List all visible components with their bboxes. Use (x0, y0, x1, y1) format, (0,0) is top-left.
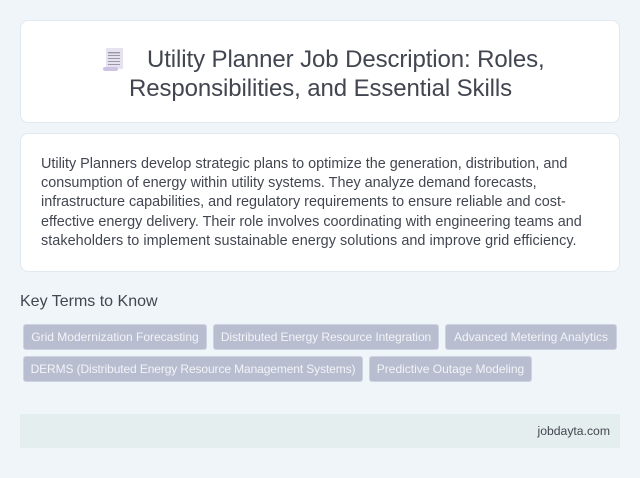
tag: advanced metering analytics (445, 324, 617, 350)
panel: description card (20, 133, 620, 272)
panel: title card (20, 20, 620, 123)
tag: DERMS (23, 356, 363, 382)
description text: effective energy delivery. Their role involves coordinating with engineering teams and (41, 214, 582, 230)
description text: stakeholders to implement sustainable energy solutions and improve grid efficiency. (41, 233, 577, 249)
tag list (23, 324, 617, 382)
tag: DERMS: DERMS (Distributed Energy Resource Management Systems) (31, 362, 355, 376)
title: Responsibilities, and Essential Skills (129, 75, 512, 102)
tag: predictive outage modeling: Predictive Outage Modeling (377, 362, 524, 376)
description text: infrastructure capabilities, and regulatory requirements to ensure reliable and cost- (41, 194, 566, 210)
tag: grid modernization forecasting: Grid Modernization Forecasting (31, 330, 199, 344)
title (129, 46, 545, 102)
tag: distributed energy resource integration: Distributed Energy Resource Integration (221, 330, 431, 344)
heading: key terms: Key Terms to Know (20, 293, 158, 310)
description text: Utility Planners develop strategic plans to optimize the generation, distribution, and (41, 156, 567, 172)
description text: consumption of energy within utility systems. They analyze demand forecasts, (41, 175, 537, 191)
footer source: jobdayta.com (538, 424, 610, 438)
tag: advanced metering analytics: Advanced Metering Analytics (454, 330, 608, 344)
tag: predictive outage modeling (369, 356, 532, 382)
tag: distributed energy resource integration (213, 324, 439, 350)
footer bar (20, 414, 620, 448)
title: Utility Planner Job Description: Roles, (147, 46, 545, 73)
description text (41, 156, 582, 249)
icon: document scroll (103, 48, 123, 71)
tag: grid modernization forecasting (23, 324, 207, 350)
